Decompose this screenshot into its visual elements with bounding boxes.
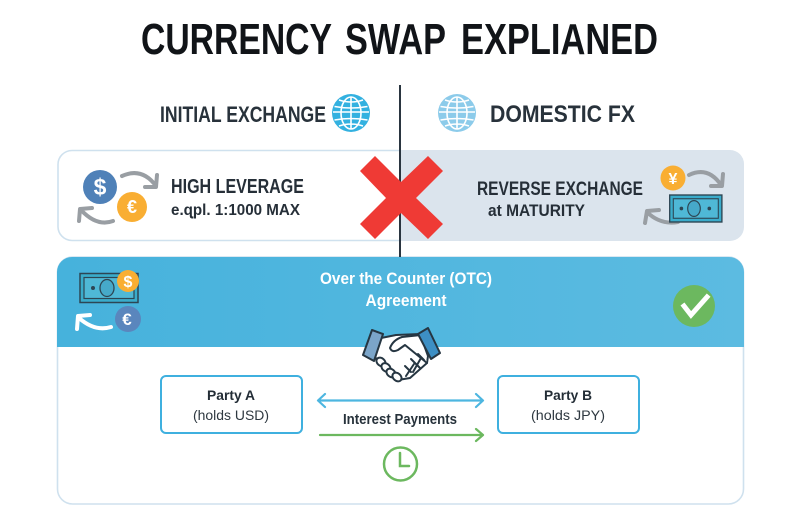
title: SWAP — [345, 15, 446, 64]
icon: dollar euro exchange: € — [127, 197, 137, 217]
panel: agreement — [57, 257, 744, 504]
agreement heading: Over the Counter (OTC) — [320, 270, 492, 288]
box: Party A: Party A — [207, 387, 255, 403]
text: high leverage — [171, 176, 304, 219]
box: Party A — [161, 376, 302, 433]
agreement heading: Agreement — [366, 292, 447, 310]
icon: banknote, coins and arrow: € — [122, 310, 132, 329]
text: high leverage: e.ɋpl. 1:1000 MAX — [171, 202, 300, 219]
icon: dollar euro exchange — [79, 170, 157, 223]
label: interest payments: Interest Payments — [343, 412, 457, 428]
arrow: two-way blue — [318, 394, 483, 407]
box: Party B: (holds JPY) — [531, 407, 605, 423]
icon: clock — [384, 448, 417, 480]
heading: initial exchange: INITIAL EXCHANGE — [160, 102, 326, 127]
heading: domestic fx: DOMESTIC FX — [490, 101, 635, 128]
text: high leverage: HIGH LEVERAGE — [171, 176, 304, 198]
panel: reverse exchange — [400, 150, 744, 241]
icon: globe blue — [332, 94, 370, 132]
title — [141, 15, 658, 64]
text: reverse exchange: at MATURITY — [488, 201, 586, 220]
divider line — [399, 85, 401, 257]
arrow: green — [320, 429, 483, 441]
panel: high leverage — [58, 150, 400, 240]
icon: globe light — [438, 94, 476, 132]
icon: banknote, coins and arrow — [77, 270, 141, 332]
icon: dollar euro exchange: $ — [94, 174, 107, 200]
agreement heading — [320, 270, 492, 310]
icon: green check — [673, 285, 715, 327]
icon: yen banknote exchange — [645, 166, 723, 223]
icon: yen banknote exchange: ¥ — [669, 171, 678, 188]
agreement header band — [57, 257, 744, 347]
icon: red cross — [360, 156, 443, 239]
title: EXPLIANED — [461, 15, 658, 64]
text: reverse exchange — [477, 179, 643, 220]
icon: handshake — [363, 328, 440, 383]
box: Party B: Party B — [544, 387, 592, 403]
box: Party B — [498, 376, 639, 433]
icon: banknote, coins and arrow: $ — [124, 274, 133, 291]
text: reverse exchange: REVERSE EXCHANGE — [477, 179, 643, 200]
title: CURRENCY — [141, 15, 332, 64]
box: Party A: (holds USD) — [193, 407, 269, 423]
